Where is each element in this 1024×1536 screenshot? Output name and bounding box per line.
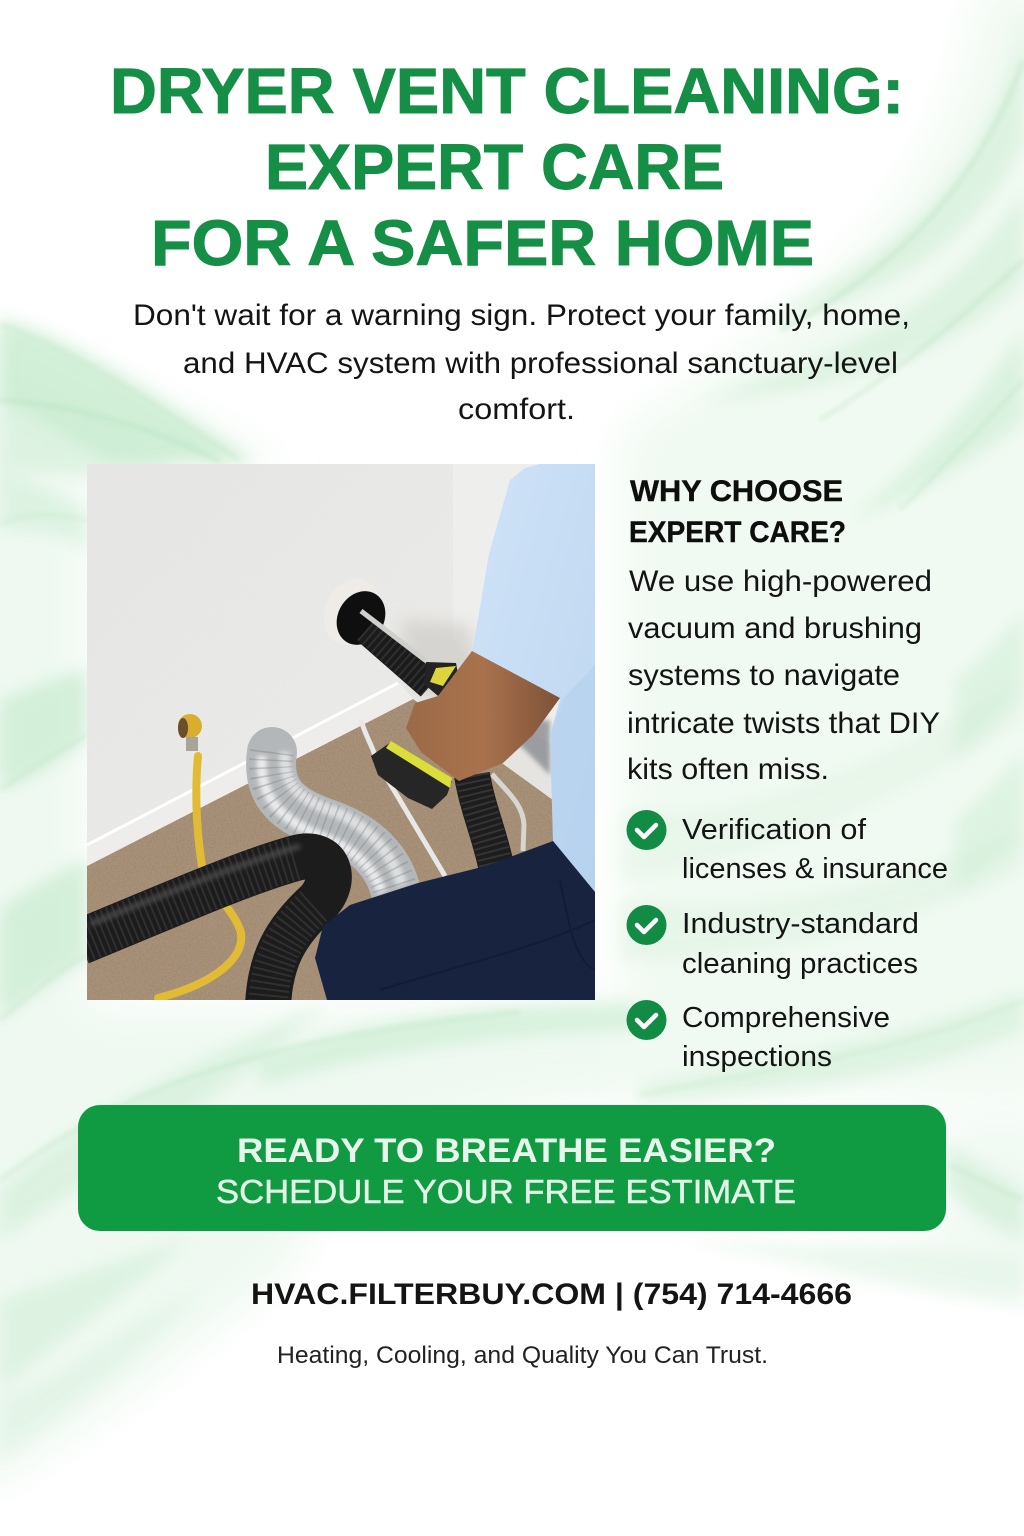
checklist item: inspections: inspections	[682, 1041, 832, 1073]
checklist item: standards	[626, 905, 919, 980]
checklist item: inspections	[626, 1000, 890, 1073]
body text block: intricate twists that DIY	[627, 707, 940, 740]
photo: technician cleaning dryer vent	[80, 464, 595, 1006]
white cables	[361, 720, 445, 876]
body text block: We use high-powered	[629, 565, 932, 598]
checklist item: standards: Industry-standard	[682, 908, 919, 940]
jeans	[315, 841, 595, 1000]
shirt	[472, 464, 595, 892]
subtitle text block	[133, 299, 910, 426]
title	[110, 55, 904, 279]
call to action banner	[78, 1105, 946, 1231]
carpet	[87, 699, 595, 1000]
call to action banner: READY TO BREATHE EASIER?	[237, 1132, 776, 1170]
call to action banner: SCHEDULE YOUR FREE ESTIMATE	[216, 1173, 796, 1210]
checklist item: licenses: licenses & insurance	[682, 853, 948, 885]
heading: why choose expert care: WHY CHOOSE	[630, 475, 843, 508]
checklist item: standards: cleaning practices	[682, 948, 918, 980]
black hose, foreground	[80, 846, 329, 1006]
title: FOR A SAFER HOME	[151, 207, 814, 279]
body text block: vacuum and brushing	[628, 612, 922, 645]
subtitle text block: and HVAC system with professional sanctuary-level	[183, 347, 898, 380]
heading: why choose expert care	[629, 475, 846, 549]
yellow and black hand tool	[371, 741, 452, 809]
baseboard	[87, 682, 413, 866]
body text block	[627, 565, 940, 786]
heading: why choose expert care: EXPERT CARE?	[629, 516, 846, 549]
right wall	[548, 700, 560, 727]
checklist item: inspections: Comprehensive	[682, 1002, 890, 1034]
title: DRYER VENT CLEANING:	[110, 55, 904, 127]
subtitle text block: comfort.	[458, 393, 575, 426]
tagline: Heating, Cooling, and Quality You Can Trust.	[277, 1342, 768, 1369]
subtitle text block: Don't wait for a warning sign. Protect your family, home,	[133, 299, 910, 332]
contact line: HVAC.FILTERBUY.COM | (754) 714-4666	[251, 1278, 852, 1311]
vent opening	[336, 591, 386, 645]
body text block: systems to navigate	[628, 659, 900, 692]
yellow gas line and fitting	[158, 714, 241, 998]
black hose, rear	[472, 775, 497, 870]
wall	[87, 464, 550, 843]
arm	[406, 651, 560, 781]
body text block: kits often miss.	[627, 753, 829, 786]
title: EXPERT CARE	[265, 131, 724, 203]
vacuum tool	[361, 611, 458, 696]
checklist item: licenses: Verification of	[682, 814, 867, 846]
silver flexible duct	[262, 752, 402, 892]
checklist item: licenses	[626, 810, 948, 885]
